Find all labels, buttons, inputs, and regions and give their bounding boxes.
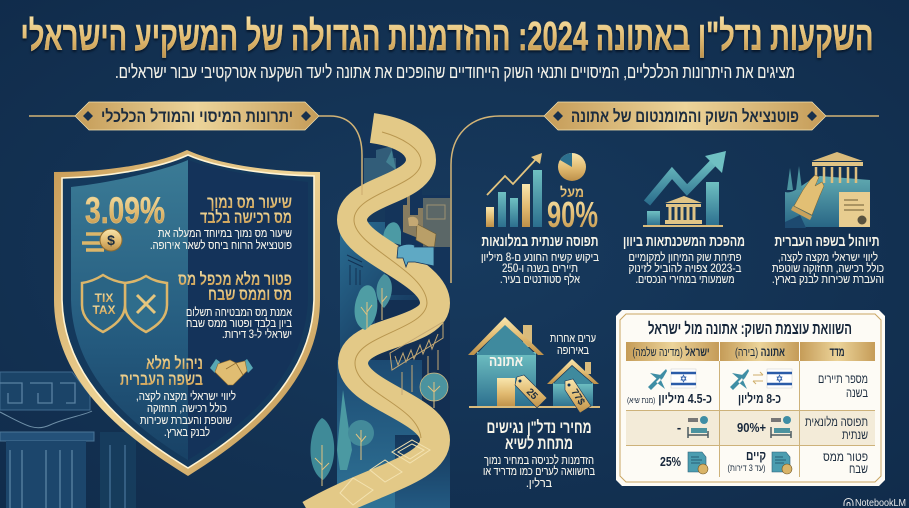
text: double tax exemption: [178, 270, 293, 341]
text: low tax: פוטנציאל הרווח ביחס לשאר אירופה.: [150, 239, 292, 252]
row: capital gains exemption: [660, 448, 868, 476]
text: mortgage revolution: משמעותי במחירי הנכסים.: [636, 274, 734, 286]
icon: tix tax shields: TIX: [95, 291, 113, 305]
row: occupancy: תפוסה מלונאית: [805, 415, 868, 429]
icon: houses with price tags: 25: [524, 387, 540, 402]
row: occupancy: 90%+: [737, 420, 766, 435]
label: other European cities: ערים אחרות: [550, 333, 596, 345]
row: capital gains exemption: פטור ממס: [823, 450, 868, 464]
path illustration: winding road: [310, 128, 450, 508]
icon: houses with price tags: [468, 317, 600, 413]
icon: occupancy chart: 90%: [547, 194, 598, 235]
icon: occupancy chart: [486, 153, 598, 235]
icon: coins: [82, 229, 122, 251]
city skyline behind road: [347, 146, 450, 285]
row: occupancy: [677, 415, 868, 442]
table header: אתונה (בירה): [735, 345, 785, 359]
icon: rising arrow and temple: [643, 151, 726, 227]
text: annual occupancy: [481, 233, 599, 286]
row: capital gains exemption: קיים: [746, 448, 766, 463]
icon: property and contract: [785, 152, 870, 228]
icon: coins: $: [107, 232, 115, 248]
text: hebrew management: בשפה העברית: [120, 370, 203, 389]
text: low tax: שיעור מס נמוך במיוחד המעלה את: [158, 227, 292, 240]
row: tourists: כ-4.5 מיליון (מנת שיא): [627, 391, 712, 406]
icon: bed: [771, 416, 791, 438]
road band: [310, 128, 435, 508]
icon: bed: [688, 416, 708, 438]
heading left: tax advantage: [29, 102, 362, 195]
greek key: [390, 322, 443, 395]
row: capital gains exemption: שבח: [849, 462, 868, 476]
text: double tax exemption: מס וממס שבח: [208, 285, 292, 304]
trees: [310, 274, 448, 486]
text: double tax exemption: ביון בלבד ופטור ממס שבח: [186, 317, 292, 330]
table header: [626, 342, 875, 361]
icon: tax document: [772, 452, 792, 474]
text: accessible prices: מתחת לשיא: [505, 434, 573, 453]
icon: occupancy chart: מעל: [560, 184, 584, 200]
row: tourists: בשנה: [846, 386, 868, 400]
text: hebrew management: ניהול מלא: [146, 354, 203, 373]
text: low tax: [150, 193, 292, 252]
row: tourists: [627, 369, 868, 406]
row: occupancy: שנתית: [842, 428, 868, 442]
icon: houses with price tags: 77$: [568, 387, 587, 408]
row: tourists: מספר תיירים: [818, 372, 868, 386]
text: double tax exemption: ישראלי ל-3 דירות.: [222, 328, 292, 341]
heading left: tax advantage: יתרונות המיסוי והמודל הכלכלי: [101, 107, 293, 126]
text: annual occupancy: תפוסה שנתית במלונאות: [482, 233, 598, 250]
icon: houses with price tags: אתונה: [489, 353, 523, 370]
row: capital gains exemption: (עד 3 דירות): [728, 463, 766, 473]
table header: ישראל (מדינה שלמה): [632, 345, 710, 359]
road centre line: [354, 132, 427, 438]
table row backgrounds: [626, 411, 875, 445]
text: accessible prices: [483, 418, 595, 490]
icon: tix tax shields: TAX: [92, 303, 116, 317]
row: occupancy: -: [677, 420, 681, 435]
heading right: market potential: [451, 102, 879, 283]
text: mortgage revolution: ב-2023 צפויה להוביל לזינוק: [628, 262, 742, 275]
text: mortgage revolution: מהפכת המשכנתאות ביוון: [623, 233, 745, 250]
text: low tax: מס רכישה בלבד: [200, 208, 292, 227]
text: hebrew management: כולל רכישה, תחזוקה: [147, 402, 227, 415]
text: accessible prices: ברלין.: [526, 477, 552, 490]
text: hebrew management: [120, 354, 236, 439]
icon: tax document: [688, 452, 708, 474]
text: accessible prices: הזדמנות לכניסה במחיר נמוך: [484, 454, 594, 467]
text: Hebrew conveyancing: [772, 233, 884, 286]
heading right: market potential: פוטנציאל השוק והמומנטום של אתונה: [571, 107, 799, 126]
panel: comparison table: [616, 310, 885, 486]
label: other European cities: [550, 333, 596, 357]
suitcases on road: [397, 217, 436, 267]
text: double tax exemption: פטור מלא מכפל מס: [178, 270, 292, 289]
text: mortgage revolution: פתיחת שוק המיחון למקומיים: [628, 251, 742, 264]
text: Hebrew conveyancing: והעברת שכירות לבנק בארץ.: [772, 273, 884, 286]
text: hebrew management: לבנק בארץ.: [164, 426, 210, 439]
text: mortgage revolution: [623, 233, 745, 286]
row: capital gains exemption: 25%: [660, 454, 681, 469]
text: low tax: שיעור מס נמוך: [207, 193, 292, 212]
text: accessible prices: מחירי נדל"ן נגישים: [486, 418, 592, 437]
stat: 3.09%: 3.09%: [85, 190, 165, 231]
text: hebrew management: ליווי ישראלי מקצה לקצה,: [136, 390, 236, 403]
row: tourists: כ-8 מיליון: [738, 391, 781, 406]
label: other European cities: באירופה: [557, 345, 589, 357]
decorative columns: [0, 372, 136, 508]
text: hebrew management: שוטפת והעברת שכירות: [140, 415, 232, 427]
text: annual occupancy: תיירים בשנה ו-250: [502, 263, 578, 275]
text: annual occupancy: ביקוש קשיח החונע ם-8 מיליון: [481, 251, 599, 264]
text: annual occupancy: אלף סטודנטים בעיר.: [500, 273, 581, 286]
text: Hebrew conveyancing: כולל רכישה, תחזוקה שוטפת: [772, 262, 884, 275]
icon: handshake: [210, 359, 253, 385]
icon: tix tax shields: [82, 275, 167, 332]
table header: מדד: [830, 345, 844, 359]
panel: shield: [54, 150, 320, 476]
road tiles: [340, 440, 430, 505]
text: accessible prices: בחשוואה לערים כמו מדריד או: [483, 465, 595, 478]
text: double tax exemption: אמנת מס המבטיחה תשלום: [186, 306, 293, 319]
text: Hebrew conveyancing: ליווי ישראלי מקצה לקצה,: [778, 251, 878, 264]
